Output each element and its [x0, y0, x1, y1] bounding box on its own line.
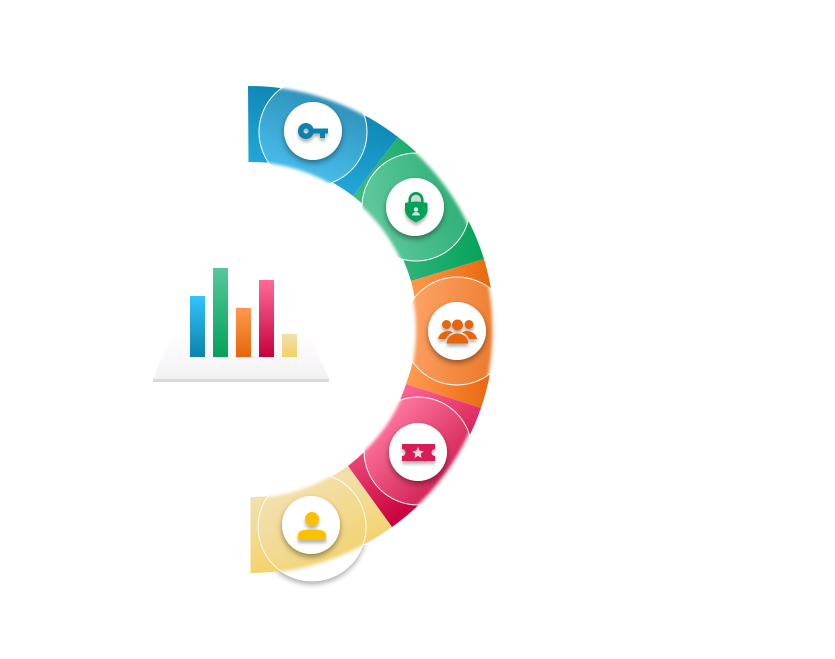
- arc: orange segment: [406, 259, 494, 408]
- icon: ticket with star: [402, 444, 435, 461]
- arc: pink segment: [348, 384, 481, 527]
- step: lock: [362, 152, 468, 262]
- icon: shield lock: [405, 192, 428, 222]
- icon: group of people: [438, 320, 477, 344]
- arc: blue segment: [248, 86, 398, 196]
- shadow of yellow circle: [273, 545, 368, 588]
- arc: yellow segment: [250, 466, 392, 573]
- bar chart bars: [190, 268, 297, 357]
- step: person: [258, 476, 366, 582]
- step: key: [258, 86, 368, 184]
- arc: green segment: [353, 137, 484, 281]
- step: ticket: [364, 396, 470, 506]
- chart: bar chart on platform: [153, 268, 329, 382]
- icon: key: [298, 123, 328, 139]
- chart platform: [153, 339, 329, 382]
- step: group: [411, 276, 495, 386]
- icon: person: [298, 512, 326, 540]
